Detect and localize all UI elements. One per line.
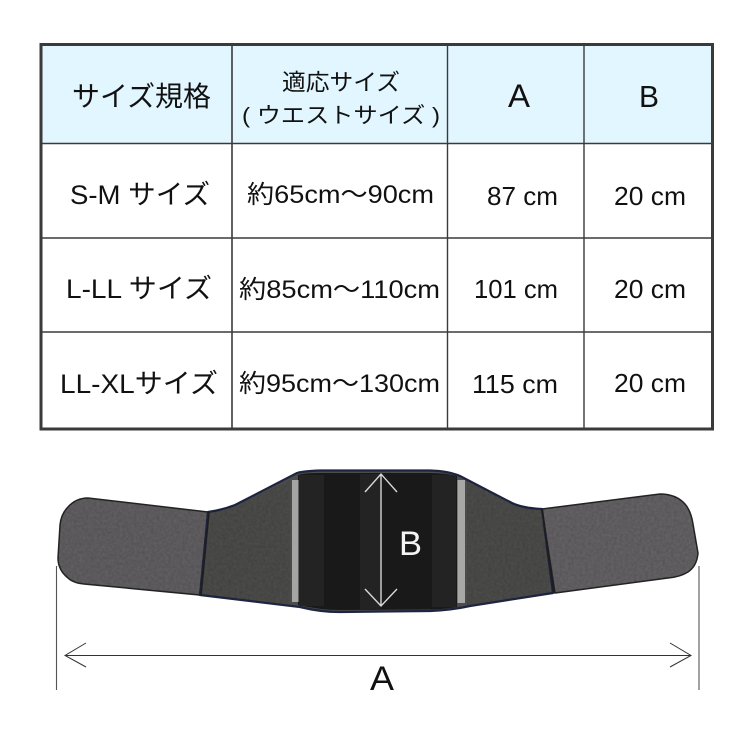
black centre panel	[298, 473, 457, 610]
dimension B label: B	[399, 525, 422, 563]
header: size standard: サイズ規格	[72, 81, 211, 112]
row: L-LL	[66, 274, 686, 304]
right silver stripe	[458, 480, 465, 603]
dimension A arrow	[65, 643, 691, 667]
row: LL-XL: 約95cm～130cm	[239, 370, 440, 398]
row: LL-XL: 115 cm	[472, 369, 558, 399]
belt body	[200, 470, 553, 612]
dimension A extension lines	[56, 566, 699, 690]
right velcro tab	[542, 494, 698, 593]
header: A: A	[508, 78, 531, 114]
header: applicable size: ( ウエストサイズ )	[242, 103, 440, 128]
row: S-M	[70, 180, 686, 211]
row: LL-XL: 20 cm	[614, 368, 686, 398]
row: LL-XL	[60, 368, 686, 399]
header: applicable size	[242, 69, 440, 128]
lumbar belt product	[58, 470, 698, 612]
row: S-M: 87 cm	[487, 181, 558, 211]
table header background	[41, 45, 712, 144]
tab join seams	[201, 509, 554, 595]
row: LL-XL: LL-XLサイズ	[60, 369, 218, 399]
header: B: B	[639, 79, 659, 114]
dimension A label: A	[370, 660, 394, 698]
row: S-M: 約65cm～90cm	[247, 181, 434, 209]
row: L-LL: 101 cm	[474, 274, 558, 304]
left velcro tab	[58, 498, 208, 595]
size table	[41, 44, 712, 429]
dimension B arrow	[365, 474, 397, 606]
row: L-LL: L-LL サイズ	[66, 274, 212, 304]
row: S-M: S-M サイズ	[70, 180, 210, 210]
header: applicable size: 適応サイズ	[282, 69, 400, 95]
row: L-LL: 20 cm	[614, 274, 686, 304]
fabric texture	[58, 480, 698, 605]
left silver stripe	[292, 480, 298, 602]
panel shading	[299, 474, 456, 610]
row: S-M: 20 cm	[614, 181, 686, 211]
row: L-LL: 約85cm～110cm	[239, 276, 440, 304]
